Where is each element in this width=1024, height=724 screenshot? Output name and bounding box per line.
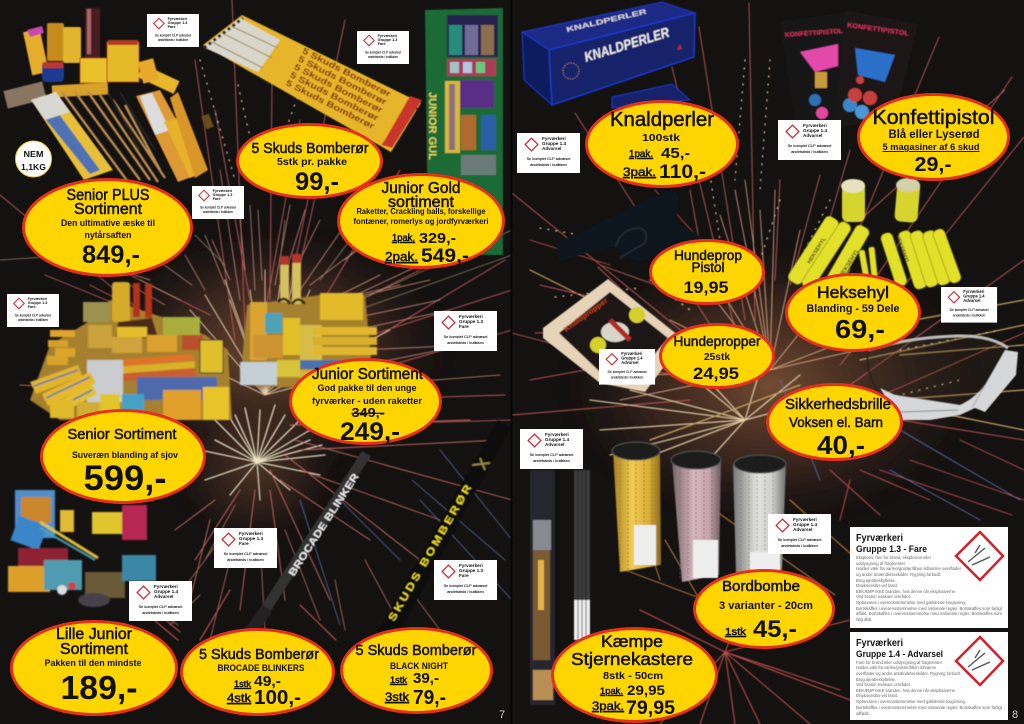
warning label: black night xyxy=(434,560,497,600)
warning label: senior plus top: andetsteds i butikken xyxy=(158,38,188,42)
price bubble: brocade blinkers: 1stk xyxy=(234,679,251,690)
warning label: bomberør top: Fare xyxy=(378,42,386,46)
hazard panel: gruppe 1.4 advarsel: Ved brand: evakuer området. xyxy=(856,681,911,687)
price bubble: senior plus sortiment: nytårsaften xyxy=(84,230,132,240)
price bubble: junior gold sortiment: 2pak. xyxy=(385,250,418,264)
price bubble: bordbombe: 3 varianter - 20cm xyxy=(719,600,813,612)
warning label: senior sortiment: Fyrværkeri xyxy=(28,297,47,301)
product: hundeprop pistol xyxy=(556,189,702,262)
warning label: brocade: Fare xyxy=(239,541,249,546)
price bubble: hundeprop pistol: Pistol xyxy=(692,260,724,275)
price bubble: senior plus sortiment xyxy=(24,180,192,276)
warning label: heksehyl: andetsteds i butikken xyxy=(953,313,985,317)
warning label: bomberør top xyxy=(357,31,409,64)
product: bomberør pack: 5 Skuds Bomberør xyxy=(284,78,377,131)
warning label: konfettipistol: Fyrværkeri xyxy=(803,123,827,128)
warning label: hundepropper: Se komplet CLP advarsel xyxy=(607,370,647,374)
price bubble: brocade blinkers: 4stk xyxy=(227,691,252,705)
product: hundepropper box: Knaldpropper xyxy=(563,297,609,334)
price bubble: kæmpe stjernekastere: 1pak. xyxy=(600,686,623,697)
price bubble: junior sortiment xyxy=(290,360,440,446)
hazard panel: gruppe 1.3 fare: BEKÆMP IKKE branden, hvis denne når eksplosiverne. xyxy=(856,588,956,594)
price bubble: bordbombe: 45,- xyxy=(753,616,797,643)
price bubble: hundeprop pistol: 19,95 xyxy=(684,278,728,297)
warning label: stjernekastere: Gruppe 1.4 xyxy=(545,437,569,442)
price bubble: konfettipistol: Blå eller Lyserød xyxy=(888,127,980,141)
warning label: knaldperler: Fyrværkeri xyxy=(542,136,566,141)
warning label: bordbombe xyxy=(768,514,831,554)
hazard panel: gruppe 1.3 fare: Holdes væk fra varme/gnister/åben ild/varme overflader xyxy=(856,565,961,571)
badge: nem 1,1kg xyxy=(16,141,52,177)
warning label: junior sortiment: Fare xyxy=(459,324,469,329)
price bubble: sikkerhedsbrille xyxy=(768,384,902,460)
price bubble: lille junior sortiment xyxy=(12,622,176,714)
warning label: stjernekastere xyxy=(520,429,583,469)
product: konfettipistol cards xyxy=(780,10,918,128)
warning label: senior plus top: Se komplet CLP advarsel xyxy=(155,33,191,37)
product: heksehyl: HEKSEHYL xyxy=(807,236,828,265)
left lower burst xyxy=(200,405,325,500)
warning label: senior plus top: Fare xyxy=(168,25,176,29)
warning label: stjernekastere: Fyrværkeri xyxy=(545,432,569,437)
product: bomberør pack: 5 Skuds Bomberør xyxy=(301,45,393,99)
right upper burst xyxy=(512,3,1024,415)
warning label: lille junior xyxy=(129,581,192,621)
price bubble: hundepropper: 25stk xyxy=(704,352,730,363)
product: skuds bomberør stick xyxy=(378,420,510,640)
price bubble: junior gold sortiment: 549,- xyxy=(421,246,469,267)
product: hundepropper box xyxy=(543,279,684,392)
price bubble: brocade blinkers: 49,- xyxy=(254,673,281,690)
badge: nem 1,1kg: 1,1KG xyxy=(21,162,46,172)
price bubble: senior plus sortiment: Den ultimative æske til xyxy=(61,218,155,228)
warning label: hundepropper: Gruppe 1.4 xyxy=(621,356,643,361)
product: stjernekastere xyxy=(530,470,590,705)
product: bomberør pack xyxy=(203,15,422,152)
price bubble: bordbombe xyxy=(694,570,834,648)
warning label: junior sortiment xyxy=(434,311,497,351)
price bubble: lille junior sortiment: Sortiment xyxy=(60,641,129,658)
warning label: hundepropper: Fyrværkeri xyxy=(621,351,642,356)
hazard panel: gruppe 1.3 fare: og andre antændelseskilder. Rygning forbudt. xyxy=(856,572,941,577)
price bubble: sikkerhedsbrille: Voksen el. Barn xyxy=(789,414,883,430)
hazard panel: gruppe 1.3 fare: Bortskaffes i overensstemmelse med nationale regler. Bortskaffes som farligt xyxy=(856,606,1003,611)
warning label: lille junior: Advarsel xyxy=(154,594,173,599)
warning label: hundepropper xyxy=(599,349,655,385)
hazard panel: gruppe 1.3 fare: Opbevares i overensstemmelse med gældende lovgivning. xyxy=(856,600,966,605)
warning label: bordbombe: Se komplet CLP advarsel xyxy=(778,537,822,542)
price bubble: knaldperler: 3pak. xyxy=(623,165,656,179)
price bubble: heksehyl: Heksehyl xyxy=(817,284,889,302)
warning label: bomberør top: andetsteds i butikken xyxy=(368,55,398,59)
warning label: bomberør top: Se komplet CLP advarsel xyxy=(365,50,401,54)
product: senior sortiment pile xyxy=(30,282,232,420)
hazard panel: gruppe 1.4 advarsel xyxy=(850,632,1008,720)
price bubble: brocade blinkers: BROCADE BLINKERS xyxy=(218,663,304,673)
price bubble: heksehyl: Blanding - 59 Dele xyxy=(806,303,900,315)
warning label: junior sortiment: Gruppe 1.3 xyxy=(459,319,483,324)
hazard panel: gruppe 1.4 advarsel: Holdes væk fra varme/gnister/åben ild/varme xyxy=(856,664,936,670)
warning label: senior plus top xyxy=(147,14,199,47)
hazard panel: gruppe 1.4 advarsel: Eksplosionsfare ved brand. xyxy=(856,693,898,698)
warning label: heksehyl: Advarsel xyxy=(963,298,980,303)
warning label: senior plus side: Fare xyxy=(213,197,221,201)
price bubble: 5 skuds bomberør 99 xyxy=(238,124,382,198)
badge: nem 1,1kg: NEM xyxy=(24,149,44,159)
warning label: lille junior: Se komplet CLP advarsel xyxy=(139,604,183,609)
price bubble: senior sortiment: 599,- xyxy=(84,459,166,498)
price bubble: hundeprop pistol: Hundeprop xyxy=(674,248,742,263)
price bubble: kæmpe stjernekastere: 8stk - 50cm xyxy=(603,670,663,682)
price bubble: black night: 5 Skuds Bomberør xyxy=(356,642,477,659)
warning label: hundepropper: Advarsel xyxy=(621,360,638,365)
price bubble: black night: 79,- xyxy=(413,687,446,709)
warning label: hundepropper: andetsteds i butikken xyxy=(611,375,643,379)
product: heksehyl: HEKSEHYL xyxy=(894,235,910,265)
price bubble: kæmpe stjernekastere xyxy=(552,628,716,722)
hazard panel: gruppe 1.3 fare: Eksplosiv, fare for brand, eksplosion eller xyxy=(856,555,931,560)
warning label: heksehyl xyxy=(941,287,997,323)
page number 8: 8 xyxy=(1012,709,1018,721)
page centre fold xyxy=(510,0,512,724)
price bubble: bordbombe: Bordbombe xyxy=(722,579,800,595)
product: heksehyl: HEKSEHYL xyxy=(839,248,861,279)
product: sikkerhedsbrille xyxy=(867,336,1018,420)
price bubble: knaldperler: 1pak. xyxy=(629,149,653,160)
warning label: heksehyl: Fyrværkeri xyxy=(963,289,984,294)
price bubble: lille junior sortiment: Pakken til den mindste xyxy=(44,658,142,668)
warning label: senior sortiment: Se komplet CLP advarsel xyxy=(15,313,51,317)
warning label: konfettipistol: Advarsel xyxy=(803,133,822,138)
price bubble: junior gold sortiment: Junior Gold xyxy=(382,180,460,197)
price bubble: knaldperler: 45,- xyxy=(661,145,690,162)
warning label: lille junior: Fyrværkeri xyxy=(154,584,178,589)
warning label: senior plus side: Fyrværkeri xyxy=(213,189,232,193)
price bubble: heksehyl: 69,- xyxy=(835,314,885,344)
price bubble: black night: 1stk xyxy=(390,675,407,686)
price bubble: knaldperler xyxy=(586,102,738,186)
price bubble: sikkerhedsbrille: Sikkerhedsbrille xyxy=(785,397,891,413)
warning label: konfettipistol xyxy=(778,120,841,160)
warning label: brocade: Gruppe 1.3 xyxy=(239,536,263,541)
price bubble: lille junior sortiment: Lille Junior xyxy=(56,626,132,643)
price bubble: 5 skuds bomberør 99: 5 Skuds Bomberør xyxy=(252,140,369,157)
price bubble: konfettipistol: 29,- xyxy=(914,154,952,176)
price bubble: knaldperler: 110,- xyxy=(659,162,706,183)
price bubble: sikkerhedsbrille: 40,- xyxy=(817,430,865,460)
product: junior gold box xyxy=(425,8,503,255)
price bubble: hundepropper: Hundepropper xyxy=(674,333,761,349)
hazard panel: gruppe 1.4 advarsel: Brug øjenbeskyttelse. xyxy=(856,677,896,682)
product: skuds bomberør stick: SKUDS BOMBERØR xyxy=(386,481,476,624)
price bubble: senior sortiment xyxy=(42,410,204,502)
warning label: bordbombe: Fyrværkeri xyxy=(793,517,817,522)
price bubble: junior gold sortiment: 1pak. xyxy=(392,233,415,244)
price bubble: konfettipistol xyxy=(858,94,1008,180)
hazard panel: gruppe 1.3 fare: Fyrværkeri xyxy=(856,533,903,544)
price bubble: senior plus sortiment: Senior PLUS xyxy=(66,187,150,204)
warning label: senior plus side: Se komplet CLP advarsel xyxy=(200,205,236,209)
hazard panel: gruppe 1.4 advarsel: overflader og andre antændelseskilder. Rygning forbudt. xyxy=(856,671,961,676)
warning label: bomberør top: Fyrværkeri xyxy=(378,34,397,38)
warning label: lille junior: Gruppe 1.4 xyxy=(154,589,178,594)
product: junior sortiment pile xyxy=(240,254,377,388)
warning label: junior sortiment: Fyrværkeri xyxy=(459,314,483,319)
price bubble: kæmpe stjernekastere: 79,95 xyxy=(626,698,675,719)
hazard panel: gruppe 1.3 fare: udslyngning af fragmenter. xyxy=(856,561,906,566)
warning label: bomberør top: Gruppe 1.3 xyxy=(378,38,397,42)
price bubble: kæmpe stjernekastere: Kæmpe xyxy=(601,633,663,651)
product: bomberør pack: 5 Skuds Bomberør xyxy=(288,70,381,123)
hazard panel: gruppe 1.4 advarsel: affald. xyxy=(856,711,870,716)
price bubble: junior sortiment: God pakke til den unge xyxy=(318,383,416,394)
warning label: bordbombe: Gruppe 1.4 xyxy=(793,522,817,527)
sparkle dots xyxy=(200,60,1000,400)
hazard panel: gruppe 1.4 advarsel: Fyrværkeri xyxy=(856,638,903,649)
price bubble: kæmpe stjernekastere: 29,95 xyxy=(627,682,665,698)
price bubble: hundeprop pistol xyxy=(650,240,764,304)
hazard panel: gruppe 1.3 fare: Brug øjenbeskyttelse. xyxy=(856,578,896,583)
warning label: konfettipistol: andetsteds i butikken xyxy=(791,149,828,154)
hazard panel: gruppe 1.4 advarsel: Bortskaffes i overensstemmelse med nationale regler. Bortskaffes som farligt xyxy=(856,705,1003,710)
product: knaldperler box: KNALDPERLER xyxy=(582,24,672,65)
warning label: senior sortiment: Gruppe 1.3 xyxy=(28,301,47,305)
warning label: knaldperler: Advarsel xyxy=(542,146,561,151)
hazard panel: gruppe 1.4 advarsel: Opbevares i overensstemmelse med gældende lovgivning. xyxy=(856,699,966,704)
price bubble: kæmpe stjernekastere: Stjernekastere xyxy=(571,649,693,669)
warning label: heksehyl: Se komplet CLP advarsel xyxy=(949,308,989,312)
warning label: knaldperler: Se komplet CLP advarsel xyxy=(527,156,571,161)
price bubble: brocade blinkers: 5 Skuds Bomberør xyxy=(199,646,319,663)
warning label: black night: Fare xyxy=(459,573,469,578)
warning label: black night: andetsteds i butikken xyxy=(447,589,484,594)
right lower burst xyxy=(640,590,850,724)
warning label: senior plus side: andetsteds i butikken xyxy=(203,210,233,214)
price bubble: bordbombe: 1stk xyxy=(725,626,747,638)
price bubble: junior sortiment: 249,- xyxy=(340,418,400,446)
price bubble: senior sortiment: Suveræn blanding af sjov xyxy=(72,450,178,460)
product: bordbombe tubes xyxy=(612,442,786,582)
hazard panel: gruppe 1.3 fare xyxy=(850,527,1008,628)
warning label: stjernekastere: andetsteds i butikken xyxy=(533,458,570,463)
price bubble: brocade blinkers xyxy=(182,630,334,714)
warning label: brocade: Se komplet CLP advarsel xyxy=(224,551,268,556)
product: junior gold box: JUNIOR GUL xyxy=(426,92,438,160)
price bubble: senior sortiment: Senior Sortiment xyxy=(68,426,177,443)
product: konfettipistol cards: KONFETTIPISTOL xyxy=(785,28,843,39)
warning label: brocade xyxy=(214,528,277,568)
warning label: lille junior: andetsteds i butikken xyxy=(142,610,179,615)
warning label: junior sortiment: Se komplet CLP advarsel xyxy=(444,334,488,339)
price bubble: junior gold sortiment: 329,- xyxy=(419,230,456,247)
price bubble: knaldperler: Knaldperler xyxy=(610,109,714,131)
product: brocade blinker stick: BROCADE BLINKER xyxy=(286,471,362,579)
hazard panel: gruppe 1.4 advarsel: Gruppe 1.4 - Advarsel xyxy=(856,649,943,659)
price bubble: senior plus sortiment: Sortiment xyxy=(74,201,143,218)
price bubble: konfettipistol: Konfettipistol xyxy=(872,107,994,129)
hazard panel: gruppe 1.4 advarsel: Fare for brand eller udslyngning af fragmenter. xyxy=(856,660,943,665)
warning label: brocade: andetsteds i butikken xyxy=(227,557,264,562)
product: bomberør pack: 5 Skuds Bomberør xyxy=(293,61,385,115)
price bubble: junior gold sortiment xyxy=(338,174,504,268)
page number 7: 7 xyxy=(499,709,505,721)
hazard panel: gruppe 1.4 advarsel: BEKÆMP IKKE branden, hvis denne når eksplosiverne. xyxy=(856,687,956,693)
warning label: senior sortiment: Fare xyxy=(28,305,36,309)
price bubble: junior gold sortiment: sortiment xyxy=(388,194,455,211)
price bubble: junior gold sortiment: Raketter, Crackling balls, forskellige xyxy=(356,207,486,216)
hazard panel: gruppe 1.3 fare: Gruppe 1.3 - Fare xyxy=(856,544,927,554)
price bubble: kæmpe stjernekastere: 3pak. xyxy=(592,699,624,713)
warning label: senior plus top: Fyrværkeri xyxy=(168,17,187,21)
warning label: knaldperler: Gruppe 1.4 xyxy=(542,141,566,146)
product: knaldperler box: KNALDPERLER xyxy=(566,9,647,34)
warning label: senior sortiment: andetsteds i butikken xyxy=(18,318,48,322)
price bubble: junior gold sortiment: fontæner, romerlys og jordfyrværkeri xyxy=(354,217,488,226)
price bubble: lille junior sortiment: 189,- xyxy=(60,669,138,706)
product: senior plus sortiment xyxy=(3,8,210,182)
price bubble: black night: 39,- xyxy=(413,670,439,687)
product: brocade blinker stick xyxy=(232,451,371,654)
hazard panel: gruppe 1.3 fare: Eksplosionsfare ved brand. xyxy=(856,583,898,588)
warning label: brocade: Fyrværkeri xyxy=(239,531,263,536)
price bubble: junior sortiment: 349,- xyxy=(352,406,384,420)
hazard panel: gruppe 1.3 fare: farligt affald. xyxy=(856,617,872,622)
warning label: stjernekastere: Se komplet CLP advarsel xyxy=(530,452,574,457)
price bubble: brocade blinkers: 100,- xyxy=(254,687,301,709)
warning label: junior sortiment: andetsteds i butikken xyxy=(447,340,484,345)
product: knaldperler box xyxy=(522,2,695,108)
price bubble: black night: 3stk xyxy=(385,690,410,704)
warning label: konfettipistol: Se komplet CLP advarsel xyxy=(788,143,832,148)
price bubble: hundepropper xyxy=(660,324,774,388)
warning label: bordbombe: Advarsel xyxy=(793,527,812,532)
hazard panel: gruppe 1.3 fare: Ved brand: evakuer området. xyxy=(856,593,911,599)
price bubble: konfettipistol: 5 magasiner af 6 skud xyxy=(882,142,980,153)
warning label: senior plus side: Gruppe 1.3 xyxy=(213,193,232,197)
warning label: black night: Gruppe 1.3 xyxy=(459,568,483,573)
warning label: black night: Se komplet CLP advarsel xyxy=(444,583,488,588)
warning label: senior plus side xyxy=(192,186,244,219)
price bubble: junior sortiment: fyrværker - uden raketter xyxy=(312,396,422,407)
price bubble: junior sortiment: Junior Sortiment xyxy=(312,366,424,383)
warning label: heksehyl: Gruppe 1.4 xyxy=(963,294,985,299)
product: konfettipistol cards: KONFETTIPISTOL xyxy=(847,22,909,38)
product: heksehyl xyxy=(786,178,962,293)
price bubble: heksehyl xyxy=(786,274,920,350)
price bubble: 5 skuds bomberør 99: 5stk pr. pakke xyxy=(277,156,347,168)
price bubble: hundepropper: 24,95 xyxy=(693,364,739,383)
product: bomberør pack: 5 Skuds Bomberør xyxy=(297,53,389,107)
price bubble: 5 skuds bomberør 99: 99,- xyxy=(295,168,339,196)
price bubble: black night: BLACK NIGHT xyxy=(390,661,448,671)
warning label: knaldperler: andetsteds i butikken xyxy=(530,162,567,167)
warning label: konfettipistol: Gruppe 1.4 xyxy=(803,128,827,133)
product: lille junior assortment xyxy=(8,490,156,607)
warning label: bordbombe: andetsteds i butikken xyxy=(781,543,818,548)
warning label: senior plus top: Gruppe 1.3 xyxy=(168,21,187,25)
price bubble: black night xyxy=(342,628,492,712)
warning label: knaldperler xyxy=(517,133,580,173)
price bubble: knaldperler: 100stk xyxy=(642,132,680,144)
hazard panel: gruppe 1.3 fare: affald. Bortskaffes i overensstemmelse med nationale regler. Bortskaffes som xyxy=(856,611,1002,616)
price bubble: senior plus sortiment: 849,- xyxy=(82,241,140,269)
warning label: stjernekastere: Advarsel xyxy=(545,442,564,447)
warning label: black night: Fyrværkeri xyxy=(459,563,483,568)
warning label: senior sortiment xyxy=(7,294,59,327)
